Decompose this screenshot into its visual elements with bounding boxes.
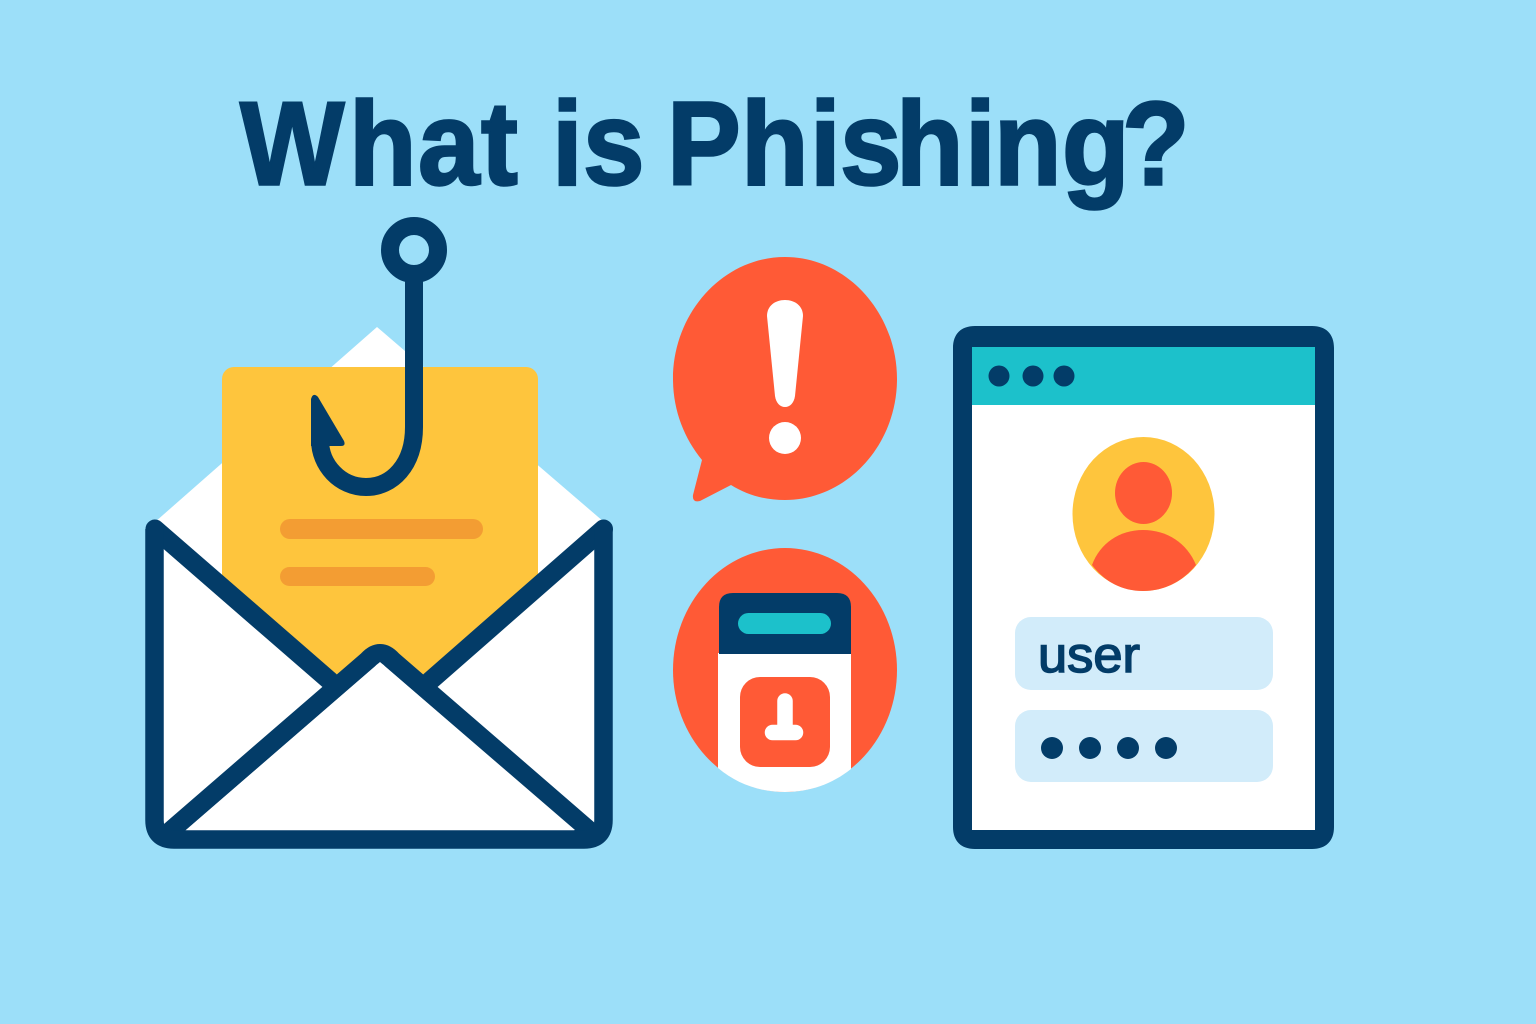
yellow letter xyxy=(222,367,538,692)
icon: alert speech bubble xyxy=(673,257,897,501)
fishing hook xyxy=(311,226,438,487)
panel: browser login window xyxy=(953,326,1334,849)
envelope front xyxy=(154,529,604,840)
password field xyxy=(1015,710,1273,782)
envelope back flap xyxy=(155,327,604,700)
icon: phone alert badge xyxy=(673,548,897,792)
user avatar xyxy=(1072,437,1214,591)
browser title bar xyxy=(970,345,1317,405)
username field: user xyxy=(1038,627,1140,683)
username field xyxy=(1015,617,1273,690)
icon: envelope with letter and hook xyxy=(154,226,604,840)
title: What is Phishing? xyxy=(240,78,1190,210)
